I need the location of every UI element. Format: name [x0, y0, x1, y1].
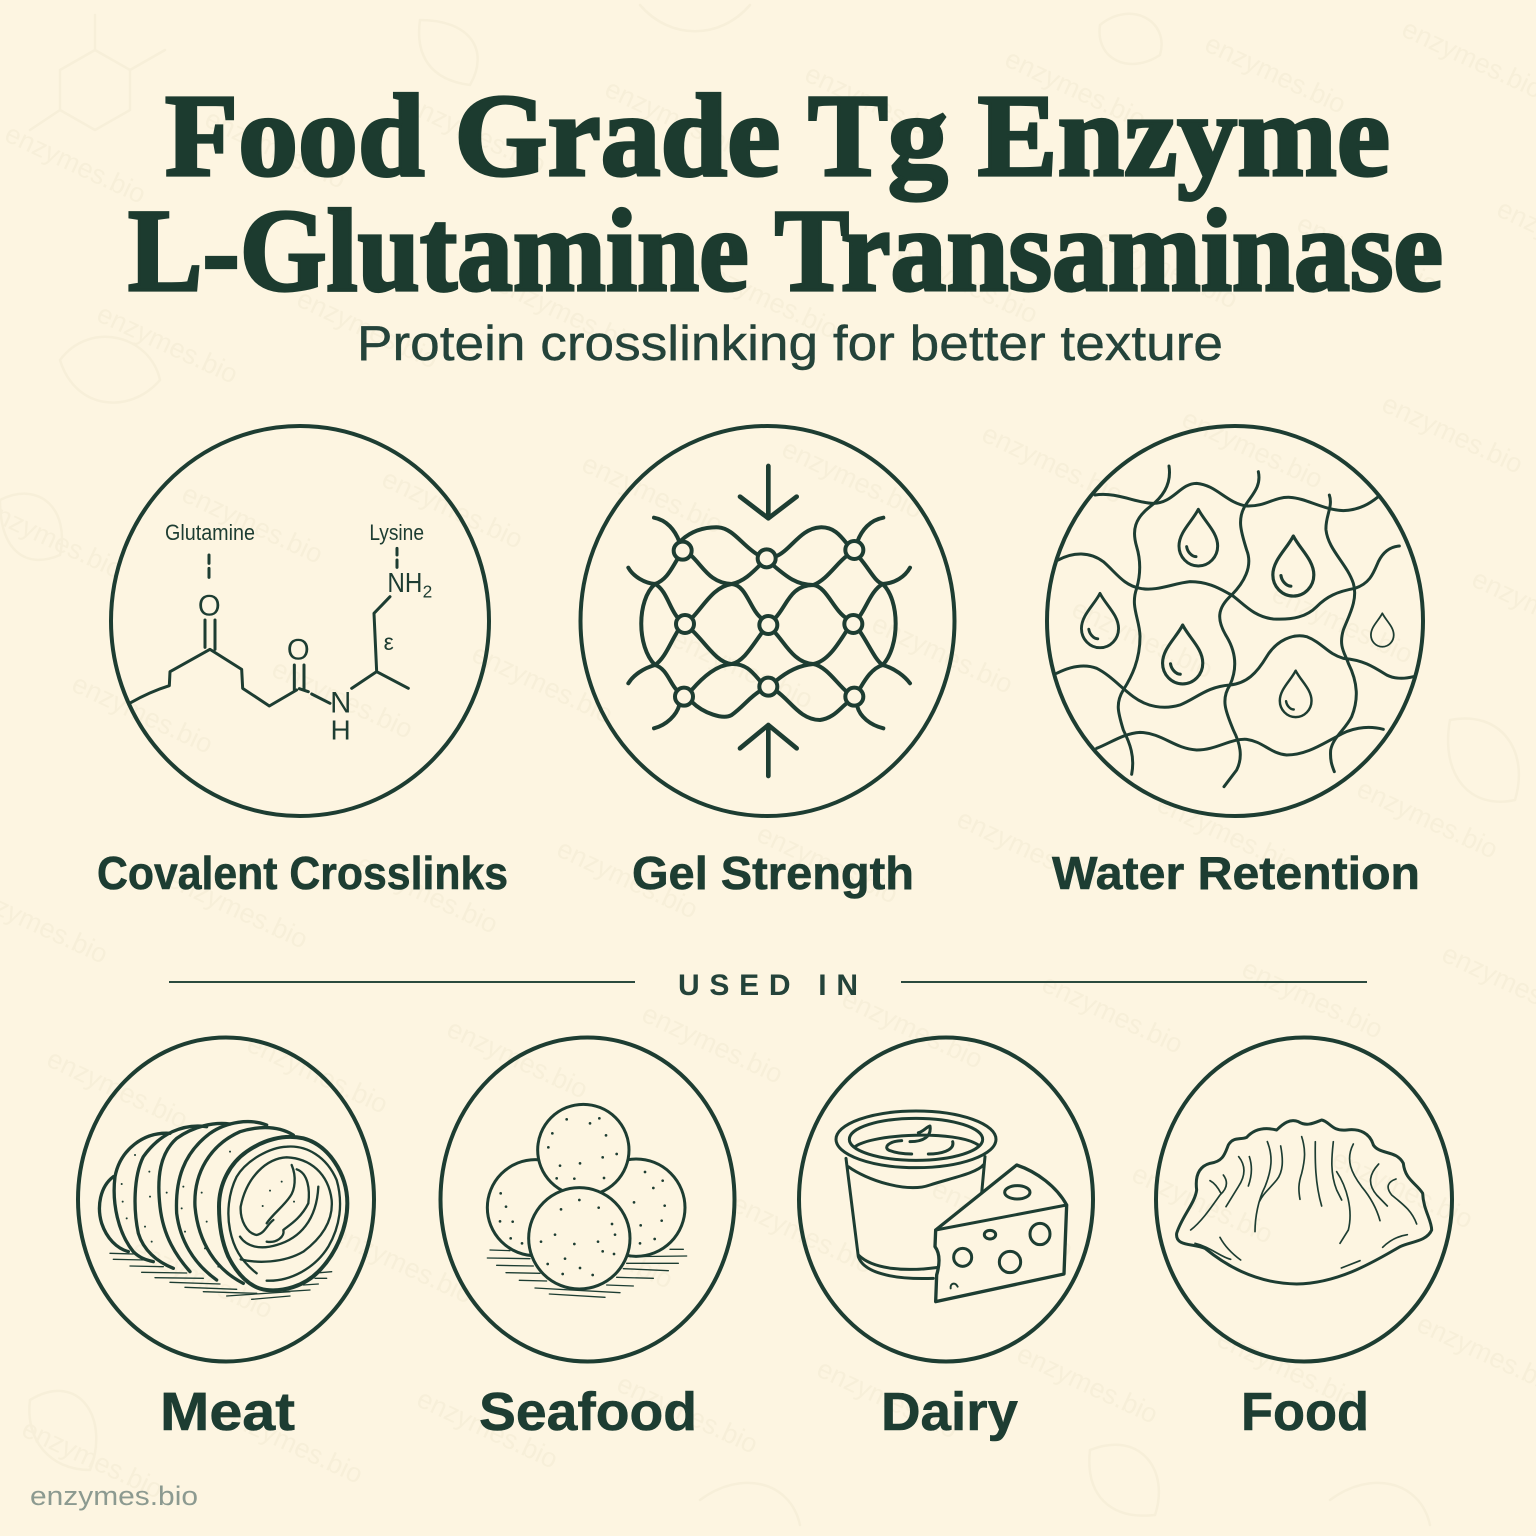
label: food: Food — [1241, 1382, 1369, 1442]
chemical structure diagram: Glutamine — [165, 520, 255, 545]
watermark pattern: enzymes.bio — [200, 103, 351, 194]
watermark pattern: enzymes.bio — [162, 863, 313, 954]
chemical structure diagram: H — [331, 714, 351, 745]
watermark pattern: enzymes.bio — [812, 1353, 963, 1444]
watermark pattern: enzymes.bio — [1327, 1143, 1478, 1234]
icon: fish balls — [487, 1104, 687, 1297]
watermark pattern: enzymes.bio — [492, 268, 643, 359]
watermark pattern: enzymes.bio — [1037, 968, 1188, 1059]
label: covalent crosslinks: Covalent Crosslinks — [97, 847, 508, 899]
watermark pattern: enzymes.bio — [1092, 223, 1243, 314]
watermark pattern: enzymes.bio — [442, 1013, 593, 1104]
polymer mesh with water drops — [1057, 466, 1413, 787]
section divider: used in: USED IN — [678, 969, 858, 1002]
circle outline — [1156, 1038, 1452, 1362]
chemical structure diagram: O — [198, 589, 221, 622]
watermark pattern: enzymes.bio — [777, 433, 928, 524]
icon: rolled meat — [99, 1122, 347, 1299]
panel: food — [1156, 1038, 1452, 1362]
chemical structure diagram: ε — [384, 629, 394, 655]
watermark pattern: enzymes.bio — [927, 1173, 1078, 1264]
watermark pattern: enzymes.bio — [412, 1383, 563, 1474]
watermark pattern: enzymes.bio — [752, 818, 903, 909]
watermark pattern: enzymes.bio — [1067, 593, 1218, 684]
panel: seafood — [440, 1038, 734, 1362]
watermark pattern: enzymes.bio — [637, 998, 788, 1089]
watermark pattern: enzymes.bio — [400, 88, 551, 179]
watermark pattern: enzymes.bio — [1000, 43, 1151, 134]
circle outline — [1047, 426, 1423, 816]
label: water retention: Water Retention — [1052, 847, 1420, 899]
panel: covalent crosslinks — [111, 426, 489, 816]
watermark pattern: enzymes.bio — [242, 1028, 393, 1119]
watermark pattern: enzymes.bio — [952, 803, 1103, 894]
chemical structure diagram: Lysine — [369, 520, 424, 545]
chemical structure diagram: 2 — [423, 581, 432, 601]
watermark pattern: enzymes.bio — [1377, 388, 1528, 479]
watermark pattern: enzymes.bio — [727, 1188, 878, 1279]
watermark pattern: enzymes.bio — [1152, 788, 1303, 879]
watermark pattern: enzymes.bio — [1352, 773, 1503, 864]
protein network with compression arrows — [628, 466, 910, 776]
panel: water retention — [1047, 426, 1423, 816]
watermark pattern: enzymes.bio — [92, 298, 243, 389]
watermark pattern: enzymes.bio — [600, 73, 751, 164]
icon: yogurt cup and cheese — [836, 1111, 1067, 1302]
title: L-Glutamine Transaminase — [128, 185, 1443, 316]
watermark pattern: enzymes.bio — [867, 608, 1018, 699]
subtitle: Protein crosslinking for better texture — [357, 317, 1223, 371]
watermark pattern: enzymes.bio — [527, 1203, 678, 1294]
title — [128, 70, 1443, 316]
watermark pattern: enzymes.bio — [0, 118, 151, 209]
watermark pattern: enzymes.bio — [352, 848, 503, 939]
panel: dairy — [799, 1038, 1093, 1362]
watermark pattern: enzymes.bio — [892, 238, 1043, 329]
chemical structure diagram: N — [330, 687, 351, 720]
watermark pattern: enzymes.bio — [177, 478, 328, 569]
watermark pattern: enzymes.bio — [377, 463, 528, 554]
watermark pattern: enzymes.bio — [837, 983, 988, 1074]
watermark pattern: enzymes.bio — [1292, 208, 1443, 299]
watermark pattern: enzymes.bio — [127, 1233, 278, 1324]
watermark pattern: enzymes.bio — [552, 833, 703, 924]
circle outline — [440, 1038, 734, 1362]
watermark pattern: enzymes.bio — [692, 253, 843, 344]
watermark pattern: enzymes.bio — [267, 653, 418, 744]
watermark pattern: enzymes.bio — [67, 668, 218, 759]
watermark pattern: enzymes.bio — [612, 1368, 763, 1459]
circle outline — [111, 426, 489, 816]
watermark pattern: enzymes.bio — [1237, 953, 1388, 1044]
panel: meat — [78, 1038, 374, 1362]
footer brand: enzymes.bio — [30, 1481, 198, 1511]
label: gel strength: Gel Strength — [632, 847, 914, 899]
title: Food Grade Tg Enzyme — [165, 70, 1390, 201]
panel: gel strength — [580, 426, 954, 816]
watermark pattern: enzymes.bio — [977, 418, 1128, 509]
watermark pattern: enzymes.bio — [1267, 578, 1418, 669]
watermark pattern: enzymes.bio — [667, 623, 818, 714]
chemical structure diagram — [131, 520, 432, 745]
watermark pattern: enzymes.bio — [1127, 1158, 1278, 1249]
watermark pattern: enzymes.bio — [1212, 1323, 1363, 1414]
label: seafood: Seafood — [479, 1382, 697, 1442]
label: dairy: Dairy — [881, 1382, 1018, 1442]
watermark pattern: enzymes.bio — [217, 1398, 368, 1489]
watermark pattern: enzymes.bio — [1177, 403, 1328, 494]
circle outline — [580, 426, 954, 816]
circle outline — [799, 1038, 1093, 1362]
watermark pattern: enzymes.bio — [42, 1043, 193, 1134]
watermark pattern: enzymes.bio — [327, 1218, 478, 1309]
watermark pattern: enzymes.bio — [467, 638, 618, 729]
watermark pattern: enzymes.bio — [292, 283, 443, 374]
watermark pattern: enzymes.bio — [1012, 1338, 1163, 1429]
chemical structure diagram: NH — [387, 567, 422, 598]
watermark pattern: enzymes.bio — [1200, 28, 1351, 119]
watermark pattern: enzymes.bio — [17, 1413, 168, 1504]
watermark pattern: enzymes.bio — [800, 58, 951, 149]
label: meat: Meat — [160, 1382, 295, 1442]
chemical structure diagram: O — [287, 633, 310, 666]
icon: dumpling — [1177, 1120, 1432, 1284]
watermark pattern: enzymes.bio — [577, 448, 728, 539]
circle outline — [78, 1038, 374, 1362]
